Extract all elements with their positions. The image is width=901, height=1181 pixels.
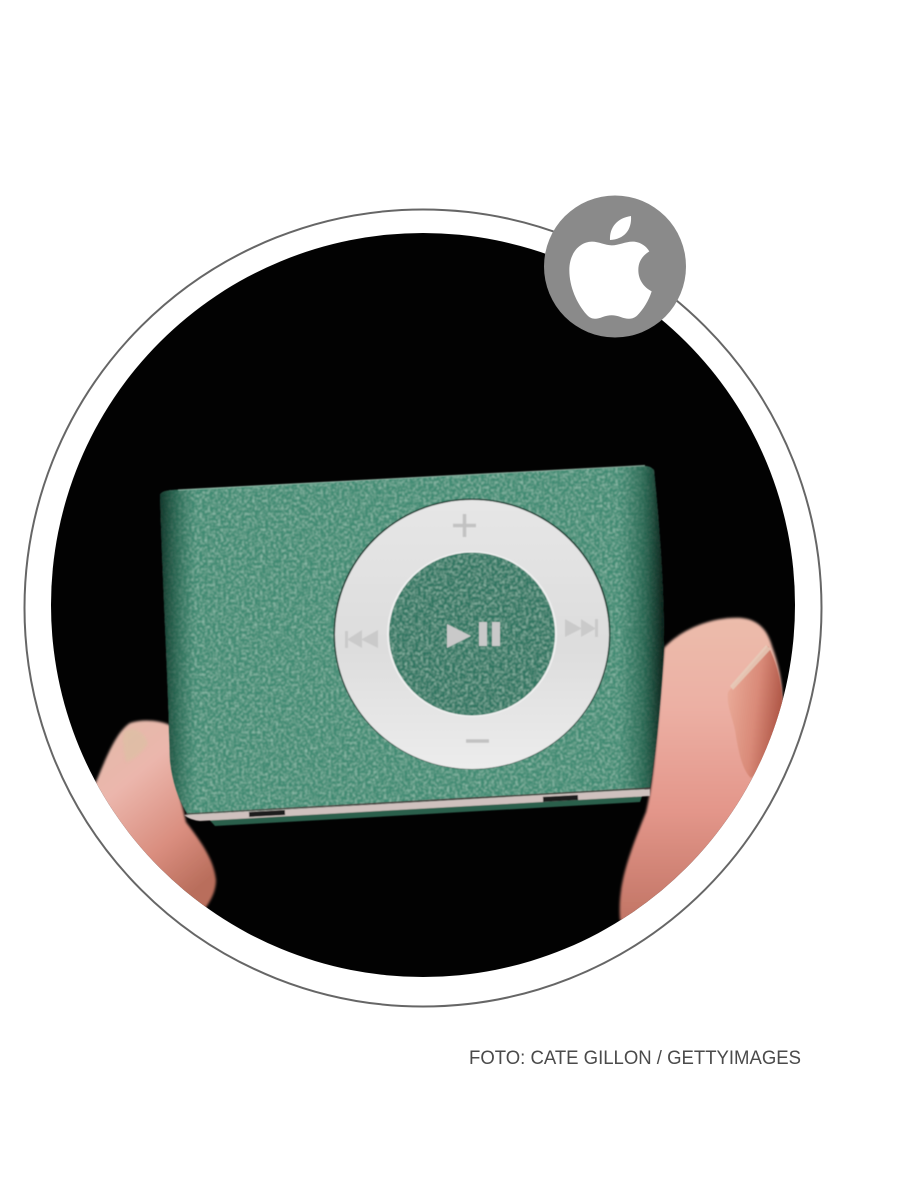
centre button [389, 552, 555, 716]
circular photo: iPod shuffle held between fingers [40, 225, 810, 985]
left fingernail highlight [128, 744, 144, 758]
clip slot right [543, 795, 578, 802]
iPod underside shadow band [205, 788, 645, 826]
iPod body [158, 460, 666, 830]
apple leaf [610, 216, 631, 240]
click wheel [334, 498, 610, 770]
next icon [565, 619, 598, 637]
thumbnail rim [730, 645, 771, 690]
clip slot left [249, 810, 285, 817]
infographic canvas [24, 196, 822, 1064]
minus icon [466, 739, 489, 743]
thumbnail [728, 646, 782, 778]
photo credit: FOTO: CATE GILLON / GETTYIMAGES [469, 1047, 801, 1069]
apple badge [544, 196, 686, 338]
previous icon [345, 630, 378, 648]
outer ring [24, 210, 822, 1006]
iPod top edge highlight [178, 466, 645, 490]
iPod side shading [158, 460, 666, 830]
play pause icon [447, 622, 500, 648]
left finger [95, 718, 218, 908]
right thumb [620, 618, 790, 930]
iPod front face [160, 466, 664, 815]
icon: apple logo [569, 216, 652, 319]
plus icon [453, 514, 476, 537]
silver clip strip [184, 789, 650, 821]
photo background [40, 225, 810, 985]
clip strip upper line [186, 788, 650, 814]
